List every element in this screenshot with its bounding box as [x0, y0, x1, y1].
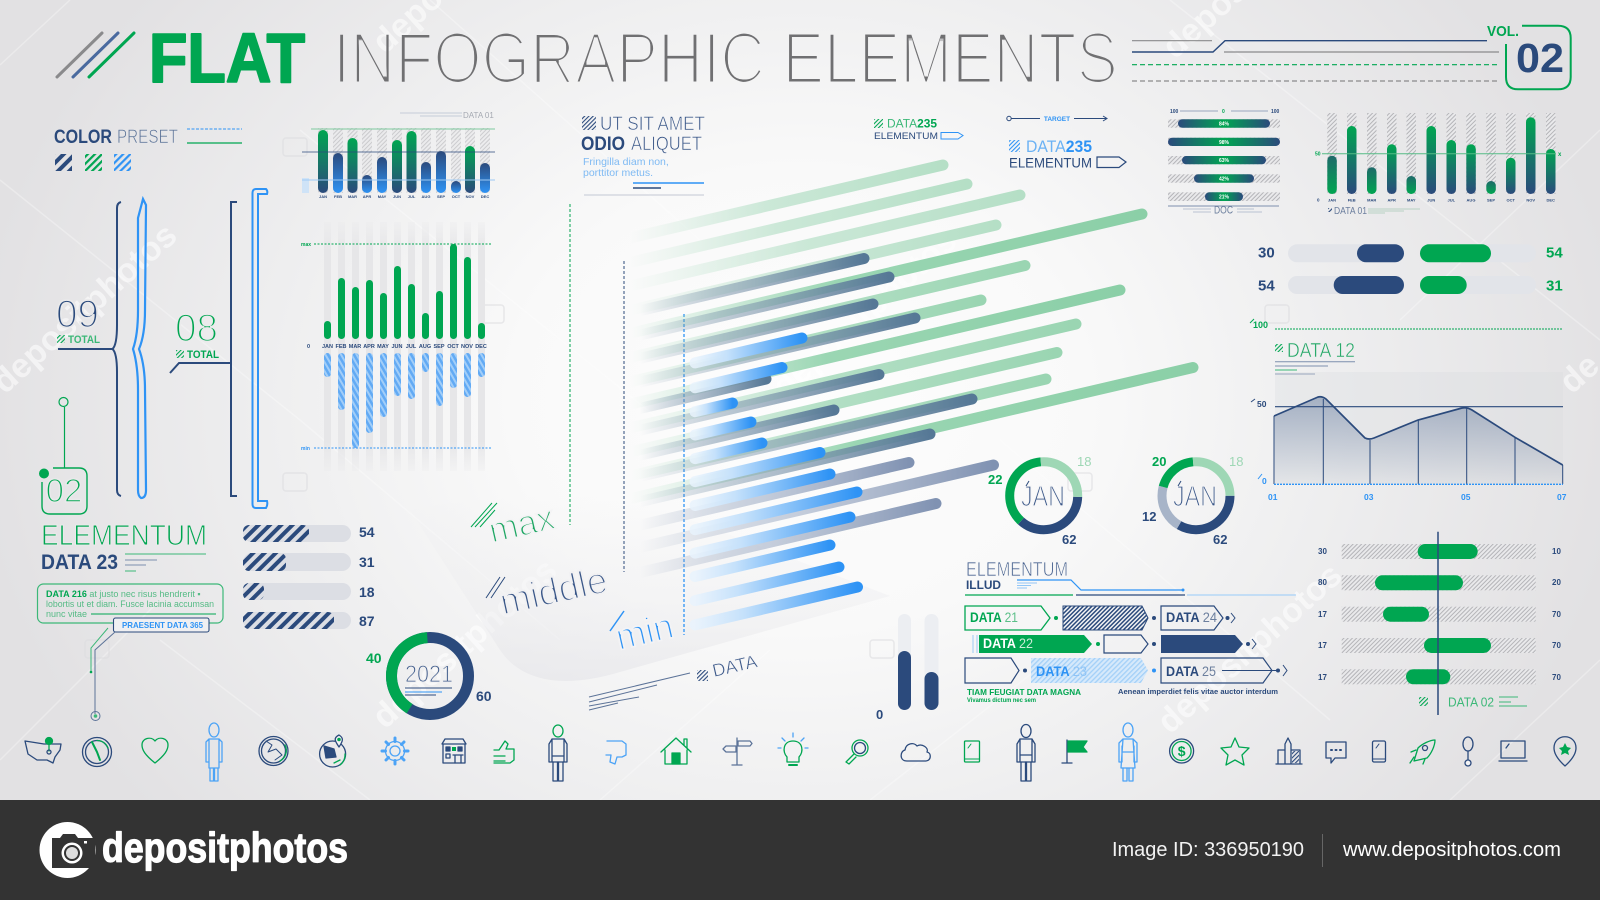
row one	[965, 606, 1235, 630]
bar chart data 01 right: MAY	[1407, 198, 1416, 203]
label data235 small	[874, 116, 963, 142]
area chart data 12: 50	[1257, 399, 1267, 409]
icon: house	[661, 738, 691, 764]
donut 2021: 2021	[405, 661, 453, 688]
label 09 total: 09	[56, 293, 99, 336]
logo wordmark: depositphotos	[102, 824, 348, 871]
icon: laptop	[1499, 741, 1527, 761]
bar chart data 01 right: DEC	[1546, 198, 1555, 203]
bar chart data 01 right: AUG	[1467, 198, 1475, 203]
icon: man green head	[549, 725, 567, 781]
month labels	[322, 344, 487, 350]
website: www.depositphotos.com	[1342, 839, 1561, 861]
watermarks: depositphotos	[1150, 556, 1349, 741]
label data235 small: DATA235	[887, 116, 937, 130]
monthly diverging bar chart	[301, 222, 491, 471]
icon row	[25, 723, 1576, 781]
icon: chat	[1326, 742, 1346, 763]
brace blue	[133, 199, 146, 498]
icon: flag	[1062, 740, 1087, 763]
small bar chart data 01 left: NOV	[466, 194, 475, 199]
captions	[967, 687, 1278, 704]
title	[57, 19, 1118, 99]
icon: woman blue	[206, 723, 222, 781]
percentage pyramid bars: 100	[1170, 109, 1179, 115]
donut jan one: 22	[988, 472, 1002, 487]
icon: bulb	[778, 733, 808, 765]
volume badge and header rules: 02	[1516, 35, 1564, 81]
percentage pyramid bars: 98%	[1219, 140, 1230, 146]
watermarks: depositphotos	[765, 221, 964, 406]
axis label middle: middle	[496, 559, 611, 623]
icon: man suit	[1017, 724, 1035, 781]
small bar chart data 01 left: SEP	[437, 194, 445, 199]
area chart data 12: 100	[1253, 320, 1268, 330]
logo	[40, 822, 348, 878]
footer band	[0, 800, 1600, 900]
month labels: AUG	[419, 344, 431, 350]
label data235 large: DATA235	[1026, 137, 1092, 156]
month labels: FEB	[336, 344, 347, 350]
month labels: JUL	[406, 344, 417, 350]
small bar chart data 01 left: APR	[363, 194, 371, 199]
bar chart data 01 right: DATA 01	[1334, 206, 1367, 217]
percentage pyramid bars: 84%	[1219, 122, 1230, 128]
small bar chart data 01 left: MAY	[378, 194, 387, 199]
small bar chart data 01 left: DEC	[481, 194, 489, 199]
small bar chart data 01 left: MAR	[348, 194, 357, 199]
heading ut sit amet	[581, 114, 705, 195]
donut jan two	[1142, 454, 1243, 547]
icon: thumb up	[494, 741, 514, 763]
donut jan one: JAN	[1021, 481, 1065, 513]
area chart data 12	[1250, 319, 1567, 502]
volume badge and header rules	[1132, 23, 1571, 89]
title slashes	[57, 33, 134, 77]
dashed level lines	[570, 204, 684, 635]
percentage pyramid bars: DOC	[1214, 204, 1233, 216]
row two	[973, 635, 1256, 653]
heading ut sit amet: ODIO	[581, 134, 625, 155]
area chart data 12: 05	[1461, 492, 1471, 502]
icon: cloud	[901, 744, 930, 761]
percentage pyramid bars: 42%	[1219, 176, 1230, 182]
green bars	[630, 165, 1193, 499]
donut jan one	[988, 454, 1091, 547]
axis label data	[589, 651, 759, 710]
donut jan two: 12	[1142, 509, 1156, 524]
small bar chart data 01 left: FEB	[334, 194, 342, 199]
heading ut sit amet: ALIQUET	[631, 134, 702, 155]
area chart data 12: 07	[1557, 492, 1567, 502]
small bar chart data 01 left: AUG	[422, 194, 430, 199]
donut 2021	[366, 623, 492, 729]
donut 2021: 60	[476, 688, 492, 704]
axis label data: DATA	[710, 651, 759, 681]
month labels: APR	[363, 344, 375, 350]
row one: DATA 21	[970, 610, 1018, 625]
label 08 total: TOTAL	[187, 349, 219, 361]
month labels: DEC	[475, 344, 487, 350]
small bar chart data 01 left: JUL	[408, 194, 416, 199]
target arrow	[1007, 116, 1107, 123]
row three	[965, 658, 1287, 683]
icon: magnifier	[846, 740, 868, 764]
paired pill bars: 54	[1258, 278, 1275, 295]
heading elementum data 23: ELEMENTUM	[41, 520, 207, 552]
bar chart data 01 right: JAN	[1328, 198, 1336, 203]
negative blue hatched bars	[324, 353, 485, 448]
donut jan one: 18	[1077, 454, 1091, 469]
month labels: JAN	[322, 344, 333, 350]
twin vertical bars	[876, 614, 938, 722]
image id: Image ID: 336950190	[1112, 839, 1304, 861]
area chart data 12: DATA 12	[1287, 340, 1355, 362]
range bars data 02: 70	[1552, 641, 1561, 650]
title bold word: FLAT	[149, 19, 305, 97]
stand shape behind chart	[410, 496, 890, 681]
title light words: INFOGRAPHIC ELEMENTS	[333, 19, 1118, 99]
area chart data 12: 01	[1268, 492, 1278, 502]
bar chart data 01 right: JUL	[1448, 198, 1456, 203]
arrow tags	[965, 606, 1287, 704]
heading ut sit amet: porttitor metus.	[583, 167, 653, 179]
heading elementum illud: ELEMENTUM	[966, 559, 1068, 581]
color preset: COLOR	[54, 127, 112, 148]
range bars data 02	[1318, 532, 1561, 715]
icon: globe with pin	[320, 735, 346, 767]
bar chart data 01 right: JUN	[1427, 198, 1435, 203]
isometric bar chart	[471, 165, 1193, 710]
icon: usa map pin	[25, 738, 61, 763]
range bars data 02: 80	[1318, 578, 1327, 587]
bar chart data 01 right: 0	[1317, 198, 1320, 203]
text callout: lobortis ut et diam. Fusce lacinia accumsan	[46, 599, 214, 609]
monthly diverging bar chart: max	[301, 242, 311, 248]
brackets with totals	[56, 189, 267, 508]
bar chart data 01 right: MAR	[1367, 198, 1376, 203]
color preset	[54, 127, 242, 171]
icon: thumb down	[606, 741, 626, 764]
donut 2021: 40	[366, 650, 382, 666]
text callout: nunc vitae	[46, 609, 87, 619]
logo mark	[40, 822, 96, 878]
range bars data 02: 20	[1552, 578, 1561, 587]
icon: dollar	[1170, 739, 1194, 763]
monthly diverging bar chart: 0	[307, 344, 310, 350]
range bars data 02: 30	[1318, 547, 1327, 556]
row three: DATA 23	[1036, 664, 1087, 679]
donut jan two: 62	[1213, 532, 1227, 547]
watermarks: depositphotos	[365, 551, 564, 736]
range bars data 02: 10	[1552, 547, 1561, 556]
captions: Vivamus dictum nec sem	[967, 698, 1036, 704]
bar chart data 01 right: APR	[1387, 198, 1396, 203]
percentage pyramid bars	[1168, 109, 1280, 216]
range bars data 02: 17	[1318, 610, 1327, 619]
bar chart data 01 right: 50	[1315, 152, 1321, 158]
navy bars	[640, 258, 994, 572]
month labels: SEP	[433, 344, 445, 350]
month labels: MAY	[377, 344, 389, 350]
icon: rocket	[1410, 740, 1435, 764]
icon: gear	[382, 738, 408, 764]
small bar chart data 01 left: JAN	[319, 194, 327, 199]
month labels: OCT	[447, 344, 459, 350]
label data235 large: ELEMENTUM	[1009, 156, 1092, 170]
bar chart data 01 right: SEP	[1487, 198, 1495, 203]
month labels: MAR	[349, 344, 361, 350]
percentage pyramid bars: 0	[1222, 109, 1225, 115]
bar chart data 01 right	[1315, 113, 1562, 217]
area chart data 12: 03	[1364, 492, 1374, 502]
icon: dollar: $	[1178, 743, 1186, 759]
icon: city	[1276, 738, 1302, 764]
text callout: PRAESENT DATA 365	[122, 620, 203, 630]
label 08 total: 08	[175, 307, 218, 350]
icon: tablet	[964, 741, 980, 762]
month labels: NOV	[461, 344, 473, 350]
captions: Aenean imperdiet felis vitae auctor interdum	[1118, 687, 1278, 696]
icon: woman skirt	[1119, 723, 1137, 781]
range bars data 02: DATA 02	[1448, 695, 1494, 710]
volume badge and header rules: VOL.	[1487, 23, 1519, 40]
range bars data 02: 17	[1318, 641, 1327, 650]
bracket navy 08	[170, 202, 237, 496]
heading elementum illud: ILLUD	[966, 578, 1001, 592]
bar chart data 01 right: OCT	[1506, 198, 1515, 203]
icon: signpost	[723, 738, 752, 765]
range bars data 02: 17	[1318, 673, 1327, 682]
bar chart data 01 right: x	[1558, 152, 1562, 158]
monthly diverging bar chart: min	[301, 446, 310, 452]
heading elementum data 23	[41, 520, 207, 574]
small bar chart data 01 left: JUN	[393, 194, 401, 199]
captions: TIAM FEUGIAT DATA MAGNA	[967, 687, 1081, 697]
icon: building	[442, 739, 466, 763]
percentage pyramid bars: 100	[1271, 109, 1280, 115]
range bars data 02: 70	[1552, 673, 1561, 682]
target arrow: TARGET	[1044, 116, 1070, 123]
heading elementum data 23: DATA 23	[41, 551, 118, 574]
small bar chart data 01 left	[302, 111, 495, 199]
twin vertical bars: 0	[876, 707, 883, 722]
icon: location star	[1554, 737, 1576, 766]
small bar chart data 01 left: OCT	[452, 194, 461, 199]
row two: DATA 22	[983, 636, 1033, 651]
progress bars: 31	[359, 554, 375, 570]
range bars data 02: 70	[1552, 610, 1561, 619]
icon: star	[1221, 738, 1249, 765]
icon: globe	[259, 736, 288, 766]
text callout: DATA 216 at justo nec risus hendrerit ▪	[46, 589, 201, 599]
progress bars	[243, 524, 375, 629]
text callout	[38, 584, 223, 720]
color preset: PRESET	[117, 127, 178, 148]
blue bars	[695, 338, 858, 625]
label data235 large	[1009, 137, 1126, 170]
bar chart data 01 right: NOV	[1526, 198, 1535, 203]
badge 02: 02	[46, 472, 82, 509]
paired pill bars: 54	[1546, 244, 1563, 261]
icon: clock	[82, 738, 112, 766]
paired pill bars	[1258, 244, 1563, 295]
area chart data 12: 0	[1262, 476, 1267, 486]
bracket blue	[252, 189, 267, 508]
background tracks	[324, 222, 485, 471]
icon: heart	[142, 738, 168, 763]
positive green bars	[324, 244, 485, 339]
paired pill bars: 30	[1258, 244, 1275, 261]
heading ut sit amet: Fringilla diam non,	[583, 156, 669, 168]
brace navy 09	[58, 202, 121, 496]
progress bars: 54	[359, 524, 375, 540]
donut jan one: 62	[1062, 532, 1076, 547]
percentage pyramid bars: 63%	[1219, 158, 1230, 164]
progress bars: 18	[359, 584, 375, 600]
axis label max: max	[485, 498, 559, 551]
donut jan two: JAN	[1173, 481, 1217, 513]
donut jan two: 20	[1152, 454, 1166, 469]
icon: phone	[1372, 741, 1386, 762]
month labels: JUN	[391, 344, 403, 350]
badge 02	[39, 398, 87, 514]
progress bars: 87	[359, 613, 375, 629]
percentage pyramid bars: 21%	[1219, 194, 1230, 200]
heading elementum illud	[965, 559, 1296, 595]
label 09 total: TOTAL	[68, 334, 100, 346]
watermark cameras	[85, 138, 1289, 658]
paired pill bars: 31	[1546, 278, 1563, 295]
donut jan two: 18	[1229, 454, 1243, 469]
heading ut sit amet: UT SIT AMET	[600, 114, 705, 135]
row three: DATA 25	[1166, 664, 1216, 679]
small bar chart data 01 left: DATA 01	[463, 111, 494, 120]
bar chart data 01 right: FEB	[1348, 198, 1356, 203]
axis label min: min	[612, 605, 677, 658]
label data235 small: ELEMENTUM	[874, 131, 938, 142]
row one: DATA 24	[1166, 610, 1217, 625]
icon: key pin	[1463, 737, 1473, 766]
